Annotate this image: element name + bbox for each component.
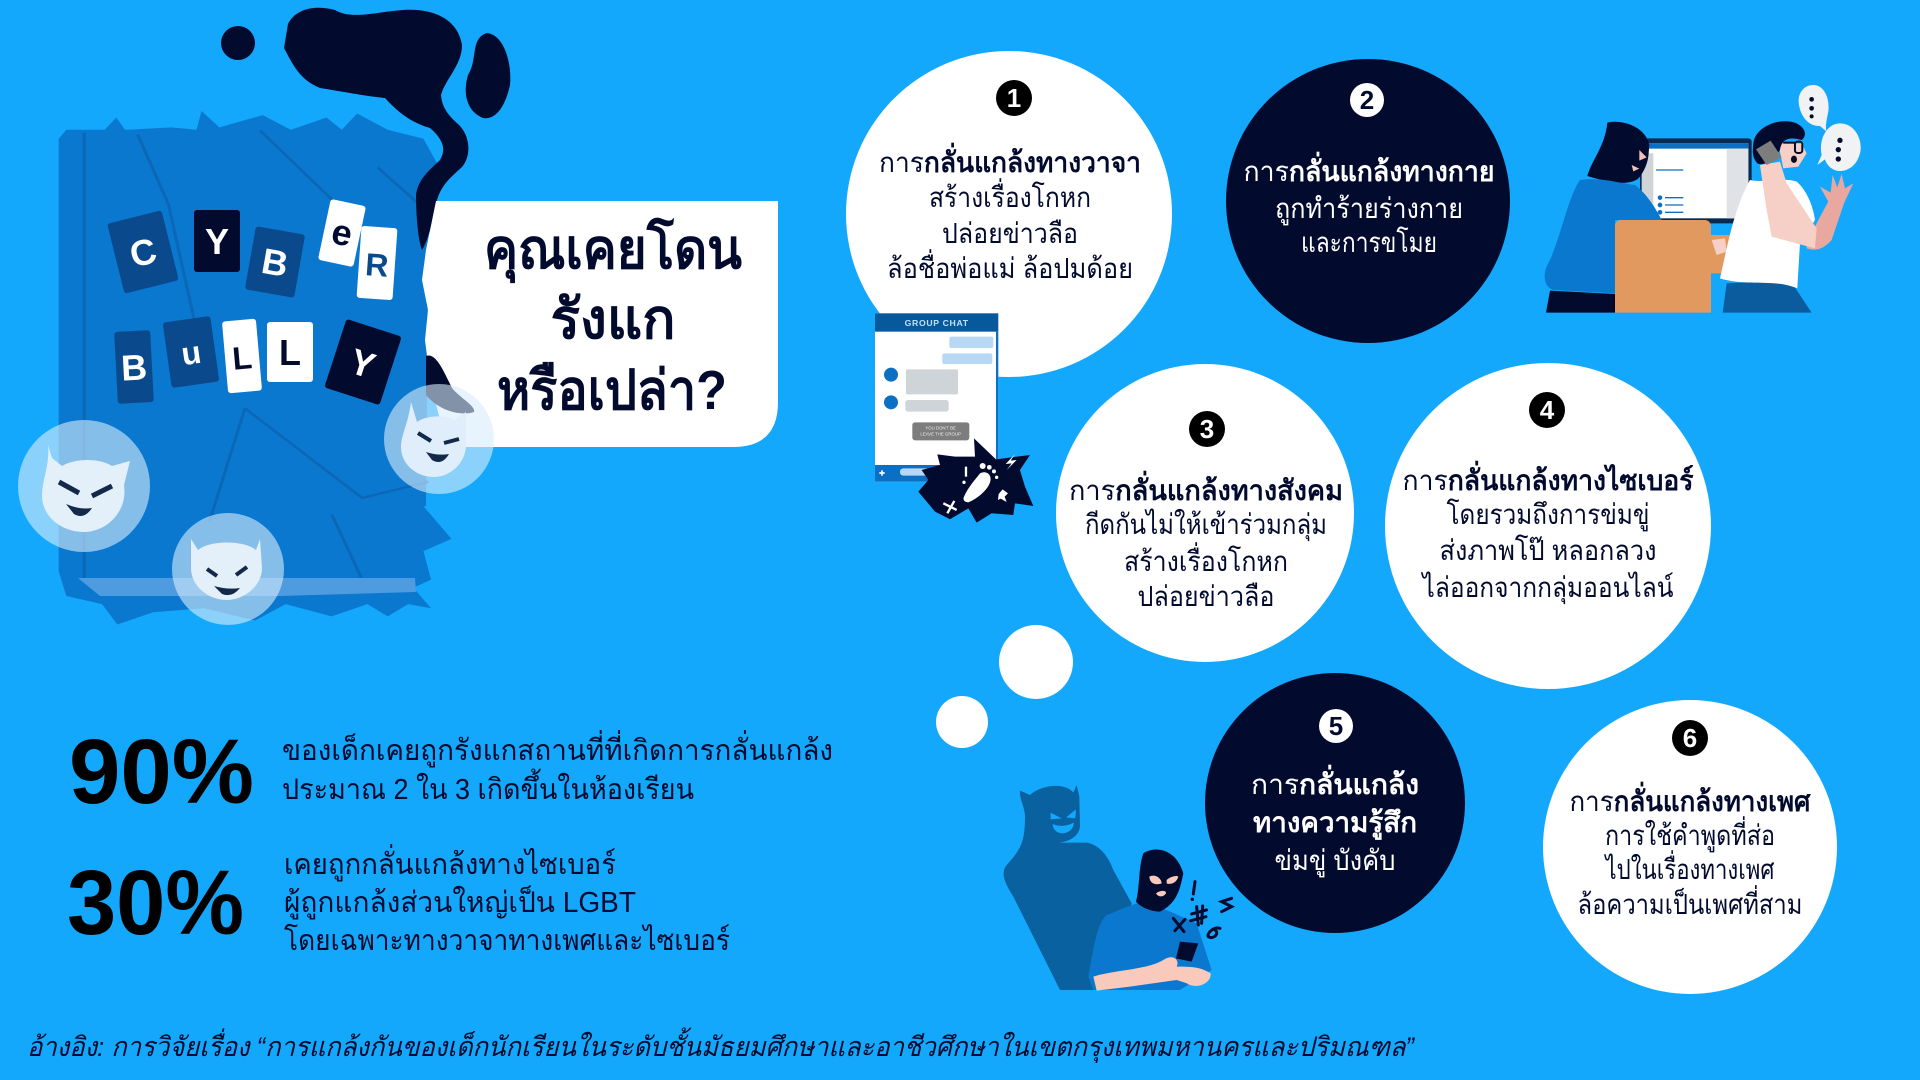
hacker xyxy=(1587,122,1649,183)
badge 1 xyxy=(996,80,1032,116)
letter tile B xyxy=(114,330,154,404)
book decorations xyxy=(84,131,429,580)
stat: 30%: เคยถูกกลั่นแกล้งทางไซเบอร์ xyxy=(284,844,616,882)
bubble 5 text: การกลั่นแกล้ง xyxy=(1251,764,1419,800)
stat: 90% xyxy=(69,721,833,823)
letter tile e: e xyxy=(328,210,356,255)
panel: bubble 5: ทางความรู้สึก xyxy=(1253,807,1417,840)
victim xyxy=(1723,280,1812,313)
bubble 4 text: การกลั่นแกล้งทางไซเบอร์ xyxy=(1402,460,1694,496)
stat: 30%: 30% xyxy=(67,852,244,954)
panel: bubble 5 xyxy=(1205,673,1465,933)
icon: devil left xyxy=(18,420,150,552)
bubble 3 text: การกลั่นแกล้งทางสังคม xyxy=(1069,470,1343,506)
letter tile e xyxy=(318,199,366,267)
panel: bubble 4: โดยรวมถึงการข่มขู่ xyxy=(1446,498,1650,532)
letter tile L xyxy=(222,319,262,393)
icon: devil bottom xyxy=(172,513,284,625)
panel: bubble 6 xyxy=(1543,700,1837,994)
panel: bubble 3: ปล่อยข่าวลือ xyxy=(1138,581,1274,612)
letter tile R: R xyxy=(364,246,390,284)
bubble 2 text: การกลั่นแกล้งทางกาย xyxy=(1244,151,1494,187)
letter tile L: L xyxy=(279,332,301,373)
book cover xyxy=(59,111,452,625)
illustration: group chat xyxy=(875,313,1033,523)
callout: question xyxy=(422,201,778,447)
illustration: masked bully with devil shadow xyxy=(1004,785,1232,991)
panel: bubble 6: การใช้คำพูดที่ส่อ xyxy=(1605,816,1775,853)
panel: bubble 6: ล้อความเป็นเพศที่สาม xyxy=(1578,885,1802,920)
panel: bubble 4 xyxy=(1385,363,1711,689)
badge 1: 1 xyxy=(1007,83,1021,113)
callout: question: หรือเปล่า? xyxy=(497,359,727,421)
icon: burst with footprint xyxy=(918,438,1033,523)
stat: 30% xyxy=(67,844,730,957)
reference footnote: อ้างอิง: การวิจัยเรื่อง “การแกล้งกันของเด็กนักเรียนในระดับชั้นมัธยมศึกษาและอาชีวศึกษาในเขตกรุงเทพมหานครและปริมณฑล” xyxy=(27,1027,1415,1064)
panel: bubble 3: กีดกันไม่ให้เข้าร่วมกลุ่ม xyxy=(1085,508,1327,542)
badge 4 xyxy=(1529,392,1565,428)
illustration: group chat: YOU DON'T BE xyxy=(925,426,956,431)
illustration: cyber bully book xyxy=(59,8,510,625)
panel: bubble 1: ล้อชื่อพ่อแม่ ล้อปมด้อย xyxy=(887,249,1133,284)
letter tile Y xyxy=(324,319,402,405)
letter tile Y: Y xyxy=(205,221,229,262)
panel: bubble 4: ส่งภาพโป๊ หลอกลวง xyxy=(1440,534,1656,566)
panel: bubble 6: ไปในเรื่องทางเพศ xyxy=(1604,850,1775,885)
badge 4: 4 xyxy=(1540,395,1555,425)
letter tile C xyxy=(107,210,179,294)
bubble 6 text: การกลั่นแกล้งทางเพศ xyxy=(1570,781,1812,817)
callout: question: คุณเคยโดน xyxy=(484,217,742,284)
panel: bubble 2: ถูกทำร้ายร่างกาย xyxy=(1275,193,1463,226)
letter tile u xyxy=(163,316,219,388)
panel: bubble 5: ข่มขู่ บังคับ xyxy=(1274,845,1396,878)
stat: 30%: โดยเฉพาะทางวาจาทางเพศและไซเบอร์ xyxy=(284,923,730,957)
stat: 30%: ผู้ถูกแกล้งส่วนใหญ่เป็น LGBT xyxy=(284,884,636,920)
stat: 90%: ของเด็กเคยถูกรังแกสถานที่ที่เกิดการกลั่นแกล้ง xyxy=(282,730,833,768)
illustration: group chat: GROUP CHAT xyxy=(905,318,969,328)
stat: 90%: 90% xyxy=(69,721,254,823)
letter tile R xyxy=(357,226,397,300)
letter tile B: B xyxy=(120,346,148,389)
letter tile C: C xyxy=(126,229,161,276)
panel: bubble 3 xyxy=(1056,364,1354,662)
bubble 1 text: การกลั่นแกล้งทางวาจา xyxy=(879,142,1141,178)
letter tile L xyxy=(267,322,313,382)
badge 6: 6 xyxy=(1683,723,1697,753)
badge 2: 2 xyxy=(1360,85,1374,115)
badge 3 xyxy=(1189,411,1225,447)
callout: question: รังแก xyxy=(550,288,676,350)
illustration: hacker watching computer user xyxy=(1545,85,1861,313)
panel: bubble 2: และการขโมย xyxy=(1301,226,1437,258)
speech bubbles xyxy=(1799,85,1861,171)
panel: bubble 3: สร้างเรื่องโกหก xyxy=(1124,542,1288,577)
icon: devil right xyxy=(384,384,494,494)
letter tile B: B xyxy=(259,240,291,285)
ink drip on callout xyxy=(426,355,474,413)
desk chair xyxy=(1615,220,1711,313)
stat: 90%: ประมาณ 2 ใน 3 เกิดขึ้นในห้องเรียน xyxy=(282,768,694,806)
panel: bubble 4: ไล่ออกจากกลุ่มออนไลน์ xyxy=(1421,572,1674,605)
letter tile B xyxy=(245,226,305,298)
badge 5 xyxy=(1319,709,1353,743)
letter tile u: u xyxy=(179,334,203,372)
panel: bubble 1 xyxy=(846,51,1172,377)
letter tile Y xyxy=(194,210,240,272)
badge 2 xyxy=(1350,83,1384,117)
letter tile Y: Y xyxy=(345,340,380,387)
panel: bubble 1: ปล่อยข่าวลือ xyxy=(942,218,1078,249)
panel: bubble 2 xyxy=(1226,59,1510,343)
badge 5: 5 xyxy=(1329,711,1343,741)
panel: bubble 1: สร้างเรื่องโกหก xyxy=(929,178,1091,213)
thought bubbles xyxy=(936,625,1073,748)
badge 6 xyxy=(1672,720,1708,756)
badge 3: 3 xyxy=(1200,414,1214,444)
illustration: group chat: LEAVE THE GROUP xyxy=(920,432,961,437)
letter tile L: L xyxy=(231,339,253,377)
ink blob xyxy=(221,8,510,250)
